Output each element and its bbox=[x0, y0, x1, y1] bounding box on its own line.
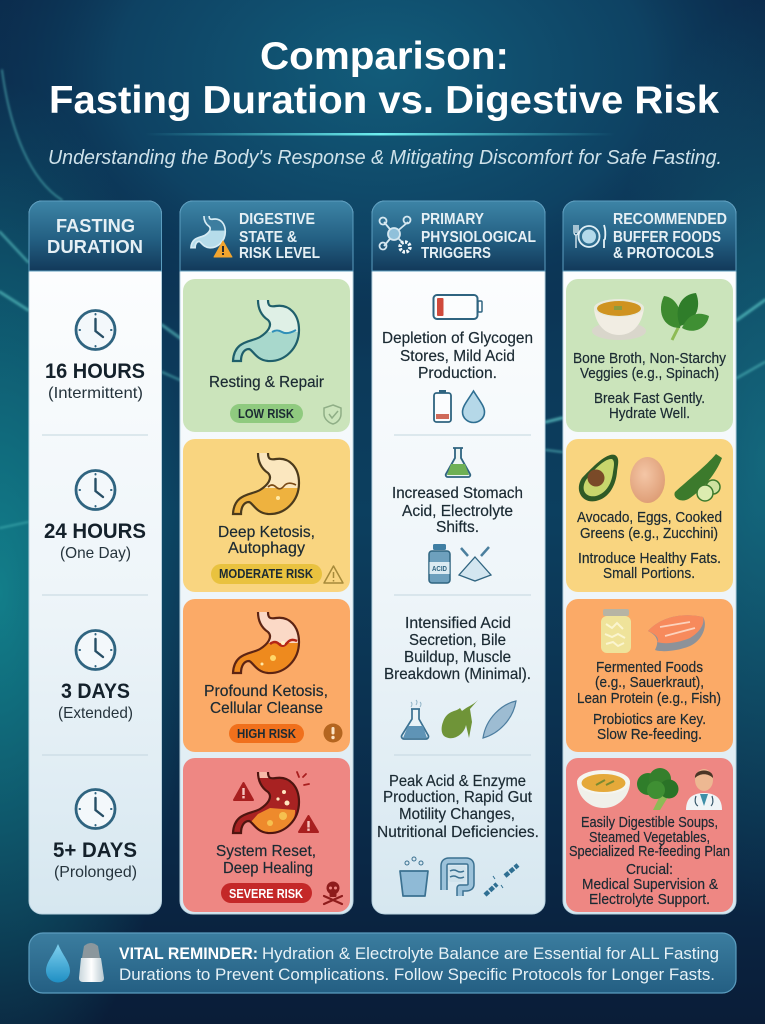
heading: digestive state: DIGESTIVE bbox=[239, 211, 315, 228]
icons: warning triangles bbox=[234, 772, 318, 832]
text: system reset: Deep Healing bbox=[223, 860, 313, 877]
text: system reset: System Reset, bbox=[216, 843, 316, 860]
heading: recommended foods: RECOMMENDED bbox=[613, 211, 727, 228]
row: 16 hours bbox=[45, 359, 145, 402]
text: trigger 2: Acid, Electrolyte bbox=[402, 503, 513, 520]
icons: beaker, gallbladder, muscle bbox=[402, 700, 516, 739]
text: trigger 4: Motility Changes, bbox=[399, 806, 515, 823]
text: foods 4: Specialized Re-feeding Plan bbox=[569, 843, 730, 860]
text: foods 3: Slow Re-feeding. bbox=[597, 726, 702, 743]
icon: stomach warning bbox=[189, 216, 232, 257]
icon: salmon bbox=[648, 615, 705, 651]
card: low risk: Resting & Repair bbox=[209, 374, 325, 391]
icon: salt shaker bbox=[79, 943, 104, 982]
text: reminder: Durations to Prevent Complications. Follow Specific Protocols for Longer Fasts. bbox=[119, 965, 715, 984]
icon: clock 5+ days bbox=[76, 790, 115, 828]
text: foods 2: Introduce Healthy Fats. bbox=[578, 550, 721, 567]
text: trigger 1: Depletion of Glycogen bbox=[382, 330, 533, 347]
text: trigger 2 bbox=[392, 485, 523, 536]
card: foods moderate risk bbox=[566, 439, 733, 592]
text: foods 1 bbox=[573, 350, 726, 422]
text: trigger 1: Stores, Mild Acid bbox=[400, 348, 515, 365]
row: 5+ days: (Prolonged) bbox=[54, 864, 137, 881]
heading: recommended foods bbox=[613, 211, 727, 262]
title: Comparison: bbox=[260, 35, 509, 78]
badge: moderate risk bbox=[211, 564, 322, 584]
heading: fasting duration bbox=[47, 215, 143, 257]
heading: fasting duration: FASTING bbox=[56, 215, 135, 236]
text: trigger 2: Shifts. bbox=[436, 519, 479, 536]
card: severe risk bbox=[183, 758, 350, 912]
text: trigger 3: Secretion, Bile bbox=[409, 632, 506, 649]
text: foods 4 bbox=[569, 814, 730, 908]
badge: low risk bbox=[230, 404, 303, 423]
icon: stomach cleanse bbox=[230, 612, 302, 677]
heading: digestive state: RISK LEVEL bbox=[239, 245, 320, 262]
text: deep ketosis: Autophagy bbox=[228, 540, 305, 557]
text: trigger 4: Nutritional Deficiencies. bbox=[377, 824, 539, 841]
text: foods 4: Electrolyte Support. bbox=[589, 891, 710, 908]
icon: clock 3 days bbox=[76, 630, 115, 670]
text: trigger 1 bbox=[382, 330, 533, 382]
title: Fasting Duration vs. Digestive Risk bbox=[49, 79, 719, 122]
text: foods 3 bbox=[577, 659, 721, 743]
text: reminder: VITAL REMINDER: bbox=[119, 944, 258, 963]
text: foods 4: Easily Digestible Soups, bbox=[581, 814, 718, 831]
icons: acid bottle and salt pile bbox=[429, 544, 491, 583]
heading: digestive state: STATE & bbox=[239, 229, 297, 246]
icon: soup bowl bbox=[577, 770, 630, 808]
text: reminder: Hydration & Electrolyte Balance are Essential for ALL Fasting bbox=[262, 944, 719, 963]
text: foods 1: Hydrate Well. bbox=[609, 405, 690, 422]
heading: primary triggers: TRIGGERS bbox=[421, 245, 491, 262]
icons: battery and water drop bbox=[434, 390, 484, 422]
heading: recommended foods: & PROTOCOLS bbox=[613, 245, 714, 262]
icon: spinach bbox=[661, 293, 709, 340]
row: 5+ days: 5+ DAYS bbox=[53, 838, 137, 862]
icon: shield bbox=[324, 405, 341, 424]
row: 16 hours: (Intermittent) bbox=[48, 385, 143, 402]
text: trigger 3 bbox=[384, 615, 531, 683]
row: 24 hours: (One Day) bbox=[60, 545, 131, 562]
icons: fizzing beaker, intestines, broken chain bbox=[400, 857, 518, 896]
text: trigger 1: Production. bbox=[418, 365, 497, 382]
panel: recommended buffer foods bbox=[563, 201, 736, 914]
icon: stomach ketosis bbox=[230, 453, 302, 518]
heading: primary triggers bbox=[421, 211, 536, 262]
heading: fasting duration: DURATION bbox=[47, 236, 143, 257]
badge: severe risk: SEVERE RISK bbox=[229, 887, 303, 901]
panel: digestive state and risk level bbox=[180, 201, 353, 914]
text: trigger 4: Production, Rapid Gut bbox=[383, 789, 533, 806]
icon: plate and cutlery bbox=[574, 225, 605, 248]
icon: avocado bbox=[579, 455, 618, 501]
text: foods 3: Fermented Foods bbox=[596, 659, 703, 676]
heading: primary triggers: PHYSIOLOGICAL bbox=[421, 229, 536, 246]
row: 3 days: (Extended) bbox=[58, 705, 133, 722]
row: 3 days bbox=[58, 679, 133, 722]
text: deep ketosis: Deep Ketosis, bbox=[218, 524, 315, 541]
icon: stomach resting bbox=[230, 300, 302, 364]
icon: low battery bbox=[434, 295, 482, 319]
row: 16 hours: 16 HOURS bbox=[45, 359, 145, 383]
text: profound ketosis bbox=[204, 683, 328, 717]
text: foods 1: Bone Broth, Non-Starchy bbox=[573, 350, 726, 367]
text: trigger 3: Breakdown (Minimal). bbox=[384, 666, 531, 683]
title bbox=[49, 35, 719, 122]
icon: stomach severe bbox=[230, 772, 302, 838]
text: foods 1: Break Fast Gently. bbox=[594, 390, 705, 407]
row: 24 hours bbox=[44, 519, 146, 562]
text: reminder bbox=[119, 944, 719, 984]
icon: clock 16 hours bbox=[76, 310, 115, 350]
text: foods 3: Probiotics are Key. bbox=[593, 711, 706, 728]
text: system reset bbox=[216, 843, 316, 877]
badge: low risk: LOW RISK bbox=[238, 407, 294, 421]
card: low risk bbox=[183, 279, 350, 432]
callout: vital reminder bbox=[29, 933, 736, 993]
text: foods 2: Small Portions. bbox=[603, 565, 695, 582]
text: foods 4: Crucial: bbox=[626, 861, 673, 878]
card: high risk bbox=[183, 599, 350, 752]
card: moderate risk bbox=[183, 439, 350, 592]
text: foods 2: Avocado, Eggs, Cooked bbox=[577, 509, 722, 526]
text: foods 3: Lean Protein (e.g., Fish) bbox=[577, 690, 721, 707]
text: profound ketosis: Cellular Cleanse bbox=[210, 700, 323, 717]
row: 24 hours: 24 HOURS bbox=[44, 519, 146, 543]
icon: flask bbox=[446, 448, 470, 477]
text: foods 1: Veggies (e.g., Spinach) bbox=[580, 365, 719, 382]
icon: zucchini bbox=[674, 454, 722, 501]
heading: recommended foods: BUFFER FOODS bbox=[613, 229, 721, 246]
badge: moderate risk: MODERATE RISK bbox=[219, 567, 313, 581]
text: trigger 3: Buildup, Muscle bbox=[404, 649, 511, 666]
row: 3 days: 3 DAYS bbox=[61, 679, 130, 703]
panel: fasting duration bbox=[29, 201, 162, 914]
text: deep ketosis bbox=[218, 524, 315, 557]
text: trigger 4 bbox=[377, 773, 539, 841]
icon: doctor bbox=[686, 769, 722, 810]
heading: digestive state bbox=[239, 211, 320, 262]
icon: warning triangle bbox=[324, 566, 343, 583]
icon: sauerkraut jar bbox=[601, 609, 631, 653]
text: foods 2: Greens (e.g., Zucchini) bbox=[580, 525, 718, 542]
icon: bone broth bbox=[592, 299, 646, 340]
badge: high risk bbox=[229, 724, 304, 743]
heading: primary triggers: PRIMARY bbox=[421, 211, 485, 228]
card: foods low risk bbox=[566, 279, 733, 432]
text: foods 4: Medical Supervision & bbox=[582, 876, 718, 893]
badge: high risk: HIGH RISK bbox=[237, 727, 296, 741]
text: foods 2 bbox=[577, 509, 722, 582]
icon: broccoli bbox=[637, 768, 678, 810]
card: foods severe risk bbox=[566, 758, 733, 912]
row: 5+ days bbox=[53, 838, 137, 881]
panel: primary physiological triggers bbox=[372, 201, 545, 914]
icon: exclamation bbox=[324, 724, 342, 742]
icon: molecular network gear bbox=[380, 216, 410, 252]
icon: water drop bbox=[46, 944, 70, 982]
badge: severe risk bbox=[221, 883, 312, 903]
subtitle: Understanding the Body's Response & Mitigating Discomfort for Safe Fasting. bbox=[48, 146, 722, 169]
text: trigger 2: Increased Stomach bbox=[392, 485, 523, 502]
icon: egg bbox=[630, 457, 665, 503]
text: profound ketosis: Profound Ketosis, bbox=[204, 683, 328, 700]
icons: acid bottle and salt pile: ACID bbox=[432, 566, 447, 573]
card: foods high risk bbox=[566, 599, 733, 752]
text: trigger 3: Intensified Acid bbox=[405, 615, 511, 632]
text: foods 4: Steamed Vegetables, bbox=[589, 829, 710, 846]
icon: clock 24 hours bbox=[76, 470, 115, 510]
text: foods 3: (e.g., Sauerkraut), bbox=[595, 674, 704, 691]
text: trigger 4: Peak Acid & Enzyme bbox=[389, 773, 526, 790]
icon: skull and crossbones bbox=[324, 882, 342, 904]
